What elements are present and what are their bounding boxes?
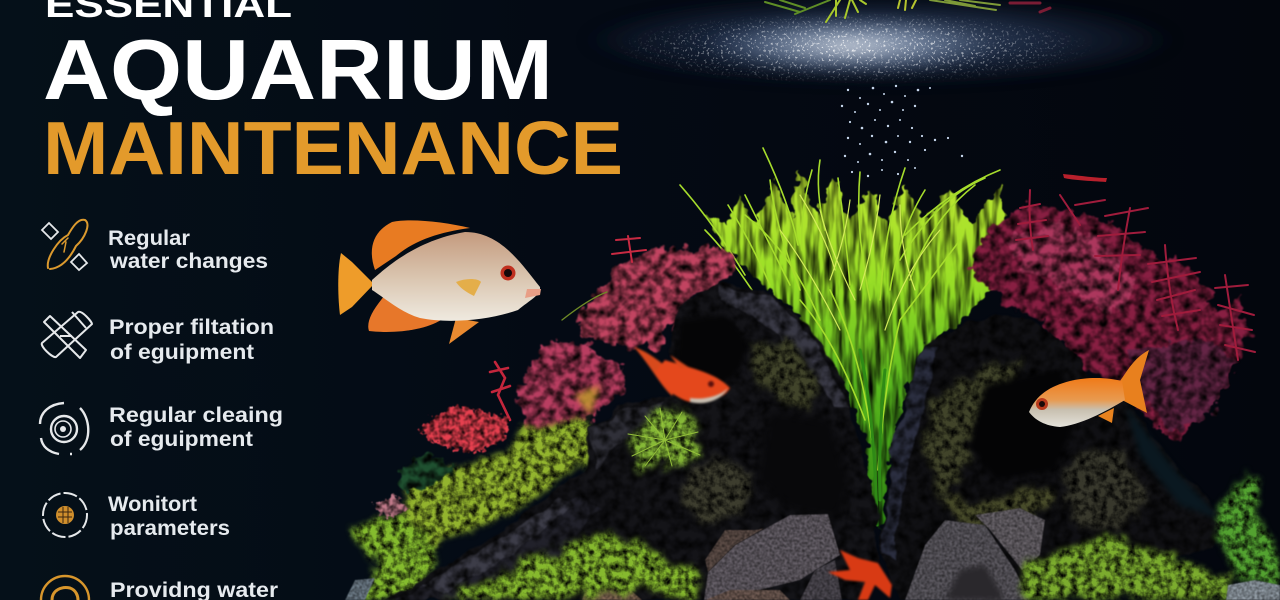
text: wonitort parameters (108, 493, 230, 540)
icon: cleaning cycle (40, 403, 88, 454)
stones: bottom right (905, 508, 1045, 600)
item: providing water (41, 576, 278, 600)
item: regular cleaning (40, 403, 283, 454)
rock: left driftwood rock (382, 282, 878, 600)
icon: crossed filters (42, 312, 92, 358)
text: proper filtation: Proper filtation (109, 316, 274, 339)
fish: large orange-finned fish (338, 220, 541, 344)
text: proper filtation (109, 316, 274, 364)
plant: bottom moss (345, 478, 1280, 600)
text: regular water changes (108, 227, 268, 273)
text: regular cleaing: of eguipment (110, 428, 253, 451)
surface light and bubble cloud (580, 0, 1180, 177)
rising bubbles (841, 85, 963, 177)
stones: bottom centre (582, 514, 842, 600)
plant: pink-red rotala, upper middle (562, 236, 735, 350)
text: regular water changes: Regular (108, 227, 190, 250)
plant: left fern and moss mass (352, 420, 600, 600)
icon: gauge (43, 493, 87, 537)
text: regular cleaing: Regular cleaing (109, 404, 283, 427)
fish: small red dash (1063, 174, 1107, 182)
heading: aquarium: AQUARIUM (43, 23, 553, 118)
text: wonitort parameters: parameters (110, 517, 230, 540)
reflected grass at top edge (765, 0, 1050, 22)
icon: water hose (42, 220, 87, 270)
icon: water badge (41, 576, 89, 600)
fish: red fish among plants (634, 347, 730, 403)
plant: fern on rock (628, 405, 704, 468)
plant: bright green grass (680, 148, 1006, 530)
item: regular water changes (42, 220, 268, 273)
item: proper filtration (42, 312, 274, 364)
heading: maintenance: MAINTENANCE (43, 106, 623, 190)
plant: pink rotala, lower middle (490, 340, 625, 440)
plant: dark crimson ludwigia, right (968, 190, 1255, 440)
item: monitor parameters (43, 493, 230, 540)
fish: orange and silver fish, right (1029, 350, 1149, 427)
plant: coral-red cluster (420, 405, 510, 452)
text: proper filtation: of eguipment (110, 341, 254, 364)
text: regular water changes: water changes (109, 250, 268, 273)
panel: title and checklist (40, 0, 623, 600)
rock: right mossy rock (880, 315, 1226, 600)
shrimp: red (828, 550, 892, 600)
text: regular cleaing (109, 404, 283, 451)
text: wonitort parameters: Wonitort (108, 493, 197, 516)
